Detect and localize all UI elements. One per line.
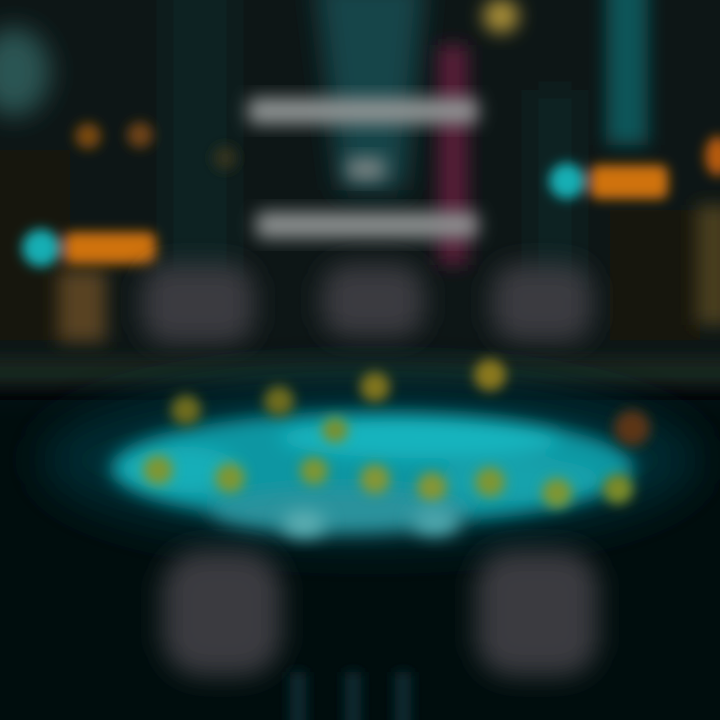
pill: left (22, 229, 156, 267)
crimson column (438, 45, 468, 265)
text block: lower left (162, 550, 282, 676)
teal light beam: right (606, 0, 648, 145)
light patches in pool (282, 508, 460, 537)
blob: right edge orange (705, 136, 720, 176)
text block: lower right (476, 550, 598, 676)
lamps: orange dots (75, 122, 237, 170)
blob: top left teal (0, 28, 50, 116)
outer dark pool (40, 375, 700, 545)
title: top line (248, 98, 478, 124)
vertical light streaks at bottom (290, 672, 411, 720)
horizon band (0, 360, 720, 384)
yellow nodes (143, 359, 650, 508)
tan column: left (58, 270, 106, 342)
text block: right (492, 264, 592, 342)
title: bottom line (256, 212, 478, 238)
tan column: right (696, 205, 720, 325)
teal light beam: centre (315, 0, 425, 190)
text block: left (142, 264, 254, 344)
title: middle word (347, 158, 385, 180)
background: upper scene (0, 0, 720, 370)
background: lower floor (0, 400, 720, 720)
cyan pool (110, 412, 634, 534)
pill: right (549, 163, 668, 199)
lamp: top yellow (483, 0, 519, 33)
text block: centre (322, 264, 424, 338)
